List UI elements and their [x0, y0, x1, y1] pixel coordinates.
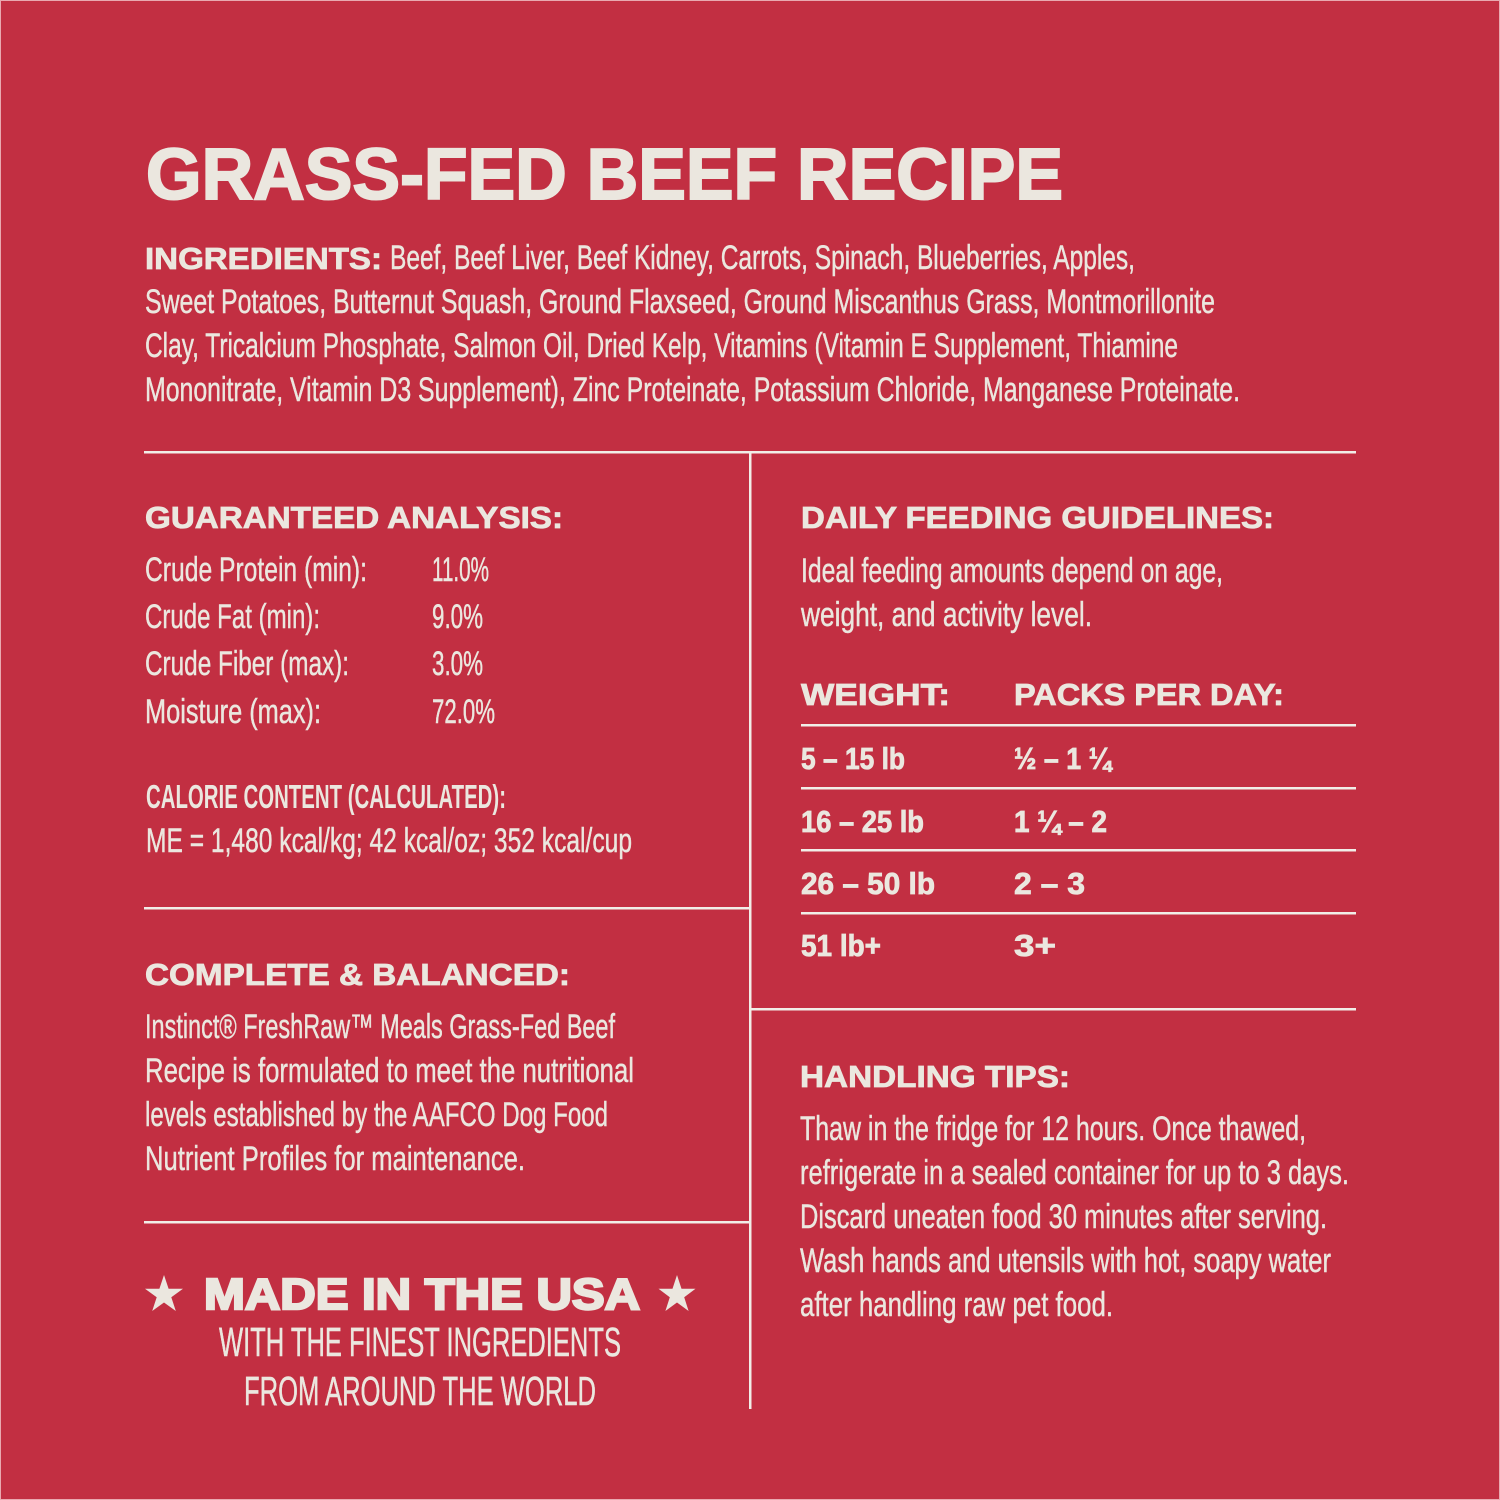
- heading: made in the usa: MADE IN THE USA: [204, 1270, 640, 1319]
- feeding table: 26 – 50 lb: [801, 866, 935, 901]
- handling tips body: after handling raw pet food.: [800, 1286, 1113, 1324]
- panel: daily feeding guidelines: [800, 500, 1284, 963]
- tagline: [219, 1319, 621, 1414]
- feeding table: 5 – 15 lb: [801, 741, 905, 776]
- analysis table: Crude Fiber (max):: [145, 645, 349, 683]
- heading: handling tips: HANDLING TIPS:: [800, 1059, 1070, 1094]
- handling tips body: Wash hands and utensils with hot, soapy water: [800, 1242, 1331, 1280]
- feeding table: 1 ¼ – 2: [1014, 804, 1107, 839]
- heading: daily feeding guidelines: DAILY FEEDING GUIDELINES:: [801, 500, 1274, 535]
- analysis table: Crude Fat (min):: [145, 598, 320, 636]
- calorie content: ME = 1,480 kcal/kg; 42 kcal/oz; 352 kcal/cup: [146, 822, 632, 860]
- panel: guaranteed analysis: [145, 500, 632, 860]
- complete and balanced body: Nutrient Profiles for maintenance.: [145, 1140, 525, 1178]
- complete and balanced body: levels established by the AAFCO Dog Food: [145, 1096, 608, 1134]
- complete and balanced body: Instinct® FreshRaw™ Meals Grass-Fed Beef: [145, 1008, 615, 1046]
- feeding table: 16 – 25 lb: [801, 804, 924, 839]
- analysis table: 9.0%: [432, 598, 483, 636]
- complete and balanced body: [145, 1008, 634, 1178]
- panel: complete and balanced: [145, 957, 634, 1178]
- handling tips body: [800, 1110, 1349, 1324]
- calorie content: [146, 778, 632, 860]
- title: GRASS-FED BEEF RECIPE: [146, 135, 1063, 215]
- heading: guaranteed analysis: GUARANTEED ANALYSIS:: [145, 500, 563, 535]
- analysis table: Moisture (max):: [145, 693, 321, 731]
- analysis table: Crude Protein (min):: [145, 551, 367, 589]
- feeding table: 2 – 3: [1014, 866, 1085, 901]
- ingredients text block: Beef, Beef Liver, Beef Kidney, Carrots, Spinach, Blueberries, Apples,: [390, 239, 1135, 277]
- feeding table: WEIGHT:: [801, 677, 950, 712]
- panel: made in the usa: [145, 1270, 696, 1414]
- feeding table: [801, 677, 1284, 963]
- tagline: FROM AROUND THE WORLD: [244, 1368, 596, 1414]
- ingredients text block: INGREDIENTS:: [145, 241, 382, 276]
- icon: left star: [145, 1275, 183, 1311]
- ingredients text block: [145, 239, 1240, 409]
- handling tips body: Thaw in the fridge for 12 hours. Once thawed,: [800, 1110, 1306, 1148]
- heading: complete and balanced: COMPLETE & BALANCED:: [145, 957, 570, 992]
- feeding table: ½ – 1 ¼: [1014, 741, 1113, 776]
- panel: handling tips: [800, 1059, 1349, 1324]
- complete and balanced body: Recipe is formulated to meet the nutritional: [145, 1052, 634, 1090]
- calorie content: CALORIE CONTENT (CALCULATED):: [146, 778, 506, 815]
- feeding intro text: [800, 552, 1223, 634]
- analysis table: 11.0%: [432, 551, 489, 589]
- analysis table: [145, 551, 495, 731]
- feeding table: 3+: [1014, 928, 1056, 963]
- analysis table: 72.0%: [432, 693, 495, 731]
- feeding intro text: weight, and activity level.: [800, 596, 1092, 634]
- feeding table: 51 lb+: [801, 928, 881, 963]
- feeding table: PACKS PER DAY:: [1014, 677, 1284, 712]
- tagline: WITH THE FINEST INGREDIENTS: [219, 1319, 621, 1365]
- feeding intro text: Ideal feeding amounts depend on age,: [801, 552, 1223, 590]
- analysis table: 3.0%: [432, 645, 483, 683]
- icon: right star: [658, 1275, 696, 1311]
- handling tips body: Discard uneaten food 30 minutes after serving.: [800, 1198, 1327, 1236]
